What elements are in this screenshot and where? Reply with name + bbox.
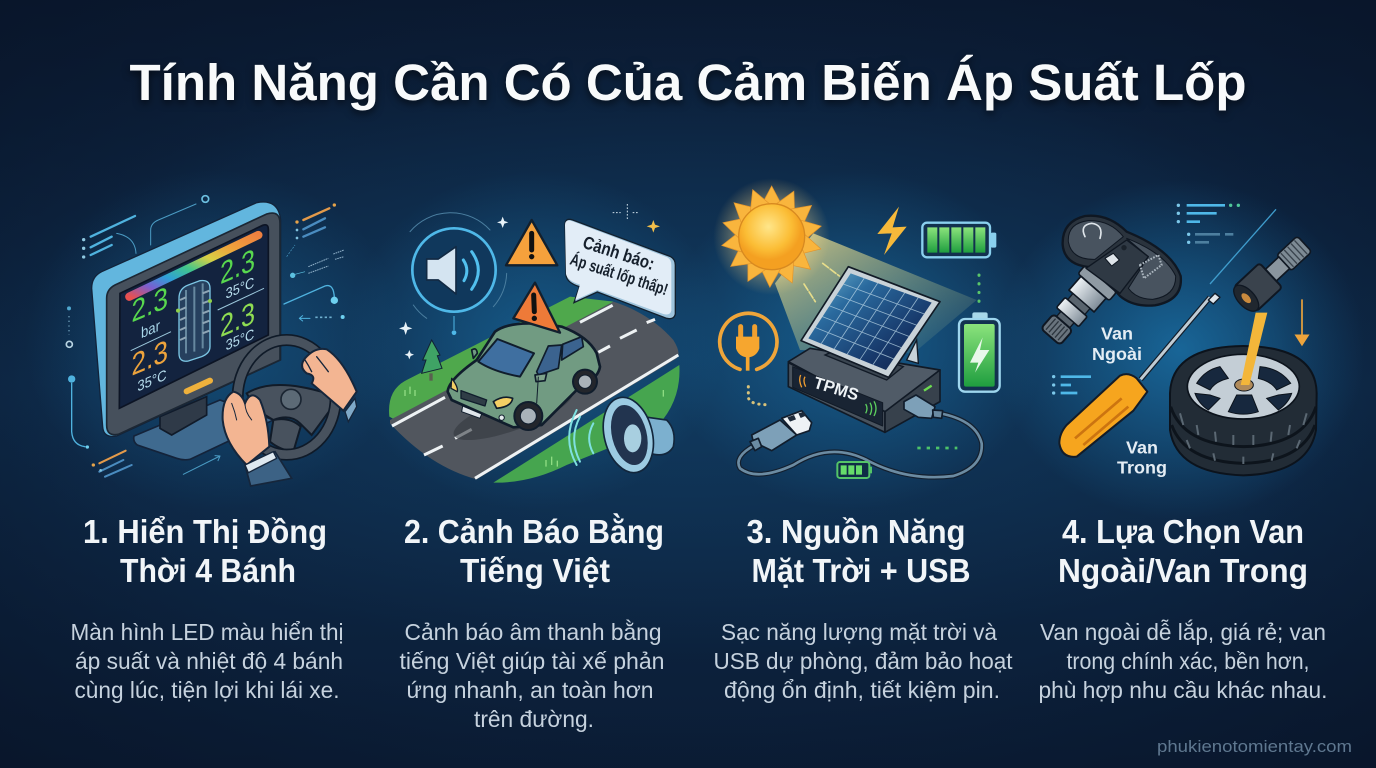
valve label inner: Van bbox=[1126, 437, 1158, 457]
pressure readings: 2.3 bbox=[220, 295, 255, 344]
rainbow status bar bbox=[129, 235, 258, 297]
body 2: ứng nhanh, an toàn hơn bbox=[406, 677, 654, 703]
speech bubble bbox=[565, 219, 675, 319]
circuit decorations bbox=[66, 196, 345, 477]
USB plug left bbox=[750, 411, 812, 451]
monitor screen bbox=[119, 225, 268, 408]
illustration: dashboard monitor and steering wheel bbox=[66, 196, 357, 486]
steering wheel bbox=[238, 340, 336, 455]
tire icon on screen bbox=[176, 280, 212, 361]
pressure readings: bar bbox=[141, 318, 161, 342]
TPMS device bbox=[788, 348, 940, 432]
valve label outer: Van bbox=[1101, 323, 1133, 343]
decorations bbox=[1052, 204, 1276, 395]
internal valve bbox=[1229, 232, 1316, 316]
road markings bbox=[392, 305, 678, 478]
heading 2: 2. Cảnh Báo Bằng bbox=[404, 513, 664, 550]
pressure readings: 2.3 bbox=[131, 333, 168, 383]
body 1: cùng lúc, tiện lợi khi lái xe. bbox=[74, 677, 340, 703]
body 2: tiếng Việt giúp tài xế phản bbox=[400, 648, 664, 674]
road bbox=[390, 302, 679, 479]
TPMS device: TPMS bbox=[811, 373, 861, 405]
body 1: áp suất và nhiệt độ 4 bánh bbox=[75, 648, 343, 674]
external valve sensor bbox=[1035, 216, 1181, 350]
plug icon bbox=[720, 313, 777, 371]
title: Tính Năng Cần Có Của Cảm Biến Áp Suất Lốp bbox=[130, 54, 1246, 111]
heading 4: 4. Lựa Chọn Van bbox=[1062, 513, 1304, 550]
body 3: USB dự phòng, đảm bảo hoạt bbox=[714, 648, 1013, 674]
car bbox=[448, 323, 600, 451]
body 3: động ổn định, tiết kiệm pin. bbox=[724, 677, 1000, 703]
heading 2: Tiếng Việt bbox=[460, 552, 610, 589]
body 1: Màn hình LED màu hiển thị bbox=[70, 619, 344, 645]
USB plug right bbox=[904, 395, 943, 418]
illustration: solar TPMS device bbox=[713, 178, 1000, 478]
light beam bbox=[775, 233, 977, 353]
warning triangle on car bbox=[513, 283, 560, 333]
pressure readings: 35°C bbox=[226, 326, 254, 354]
USB cable bbox=[738, 414, 982, 477]
body 2: Cảnh báo âm thanh bằng bbox=[404, 619, 662, 645]
battery full bbox=[922, 223, 996, 257]
speech bubble: Cảnh báo: bbox=[580, 232, 657, 274]
body 4: trong chính xác, bền hơn, bbox=[1066, 648, 1310, 674]
monitor button bbox=[187, 381, 210, 391]
screwdriver bbox=[1059, 293, 1220, 457]
tree bbox=[422, 340, 442, 381]
body 2: trên đường. bbox=[474, 706, 594, 732]
heading 4: Ngoài/Van Trong bbox=[1058, 552, 1308, 589]
warning triangle top bbox=[506, 220, 557, 265]
charging battery bbox=[959, 312, 1000, 392]
monitor frame bbox=[92, 202, 281, 436]
arrow down bbox=[1296, 299, 1308, 345]
monitor stand bbox=[134, 397, 273, 460]
loudspeaker bbox=[569, 392, 674, 478]
pressure readings: 2.3 bbox=[220, 242, 255, 291]
panel: display 4 wheels bbox=[66, 196, 357, 703]
illustration: sensor valves, screwdriver and wheel bbox=[1035, 204, 1317, 478]
speech bubble: Áp suất lốp thấp! bbox=[568, 250, 670, 299]
heading 3: Mặt Trời + USB bbox=[752, 552, 970, 589]
panel: vietnamese voice alert bbox=[389, 204, 680, 732]
illustration: car on road with alerts bbox=[389, 204, 680, 483]
panel: valve options bbox=[1035, 204, 1328, 703]
body 4: Van ngoài dễ lắp, giá rẻ; van bbox=[1040, 619, 1326, 645]
pressure readings: 2.3 bbox=[131, 279, 168, 329]
valve core tool bbox=[1241, 313, 1267, 385]
valve label inner: Trong bbox=[1117, 458, 1167, 478]
watermark: phukienotomientay.com bbox=[1157, 737, 1352, 756]
valve label outer: Ngoài bbox=[1092, 344, 1142, 364]
body 4: phù hợp nhu cầu khác nhau. bbox=[1038, 677, 1328, 703]
small battery bbox=[837, 462, 872, 478]
sparkles bbox=[399, 204, 660, 359]
sun bbox=[713, 178, 830, 295]
grass bbox=[389, 297, 680, 483]
heading 3: 3. Nguồn Năng bbox=[746, 513, 966, 550]
pressure readings: 35°C bbox=[137, 367, 167, 395]
body 3: Sạc năng lượng mặt trời và bbox=[721, 619, 997, 645]
bolt bbox=[877, 207, 907, 255]
pressure readings: 35°C bbox=[226, 274, 254, 303]
heading 1: Thời 4 Bánh bbox=[120, 552, 296, 589]
solar panel bbox=[801, 267, 940, 380]
pressure readings bbox=[131, 242, 264, 395]
hands bbox=[223, 349, 357, 486]
panel: solar and USB power bbox=[713, 178, 1013, 703]
heading 1: 1. Hiển Thị Đồng bbox=[83, 513, 327, 550]
speaker icon in circle bbox=[410, 213, 507, 335]
new wheel bbox=[1170, 346, 1317, 475]
